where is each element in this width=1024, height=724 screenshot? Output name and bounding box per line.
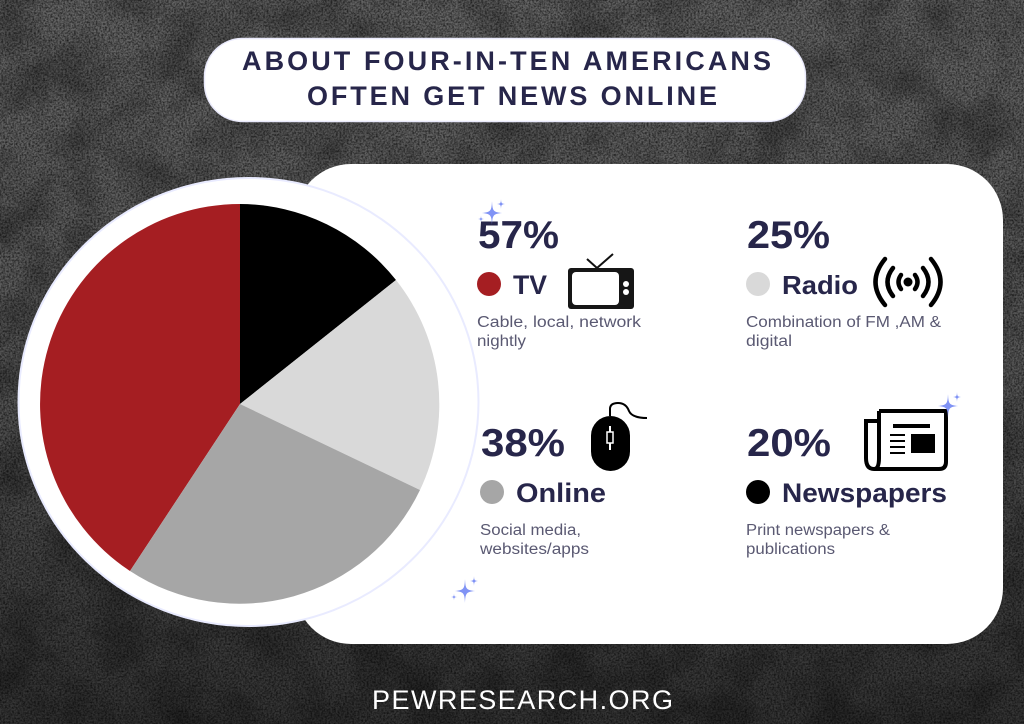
icon: computer mouse bbox=[591, 403, 647, 471]
title text: ABOUT FOUR-IN-TEN AMERICANS bbox=[242, 46, 771, 76]
slice: TV bbox=[40, 204, 240, 571]
footer source: PEWRESEARCH.ORG bbox=[372, 685, 673, 715]
pie chart with ring bbox=[18, 178, 478, 626]
block: Radio bbox=[746, 214, 942, 350]
block: TV bbox=[477, 199, 641, 350]
icon: newspaper bbox=[866, 411, 946, 469]
Online legend dot bbox=[480, 480, 504, 504]
title text: OFTEN GET NEWS ONLINE bbox=[307, 81, 717, 111]
TV percentage: 57% bbox=[478, 214, 559, 257]
TV label: TV bbox=[513, 270, 547, 300]
Radio legend dot bbox=[746, 272, 770, 296]
icon: sparkle bbox=[938, 392, 961, 418]
Radio description bbox=[746, 314, 942, 350]
Newspapers legend dot bbox=[746, 480, 770, 504]
icon: sparkle bbox=[478, 199, 505, 225]
Online description bbox=[479, 522, 589, 558]
TV description: Cable, local, network bbox=[477, 314, 641, 331]
title text bbox=[242, 46, 771, 111]
icon: television bbox=[568, 254, 634, 309]
Radio percentage: 25% bbox=[747, 214, 830, 257]
Newspapers description bbox=[746, 522, 891, 558]
Online description: Social media, bbox=[480, 522, 581, 539]
slice: Online bbox=[130, 404, 420, 604]
block: Newspapers bbox=[746, 392, 961, 558]
Newspapers description: publications bbox=[746, 541, 835, 558]
Online percentage: 38% bbox=[481, 422, 565, 465]
block: Online bbox=[451, 403, 647, 603]
title pill bbox=[204, 38, 806, 122]
Online description: websites/apps bbox=[479, 541, 589, 558]
TV description: nightly bbox=[477, 333, 526, 350]
TV legend dot bbox=[477, 272, 501, 296]
Newspapers description: Print newspapers & bbox=[746, 522, 891, 539]
Newspapers percentage: 20% bbox=[747, 422, 831, 465]
icon: broadcast signal bbox=[876, 259, 940, 305]
Radio description: Combination of FM ,AM & bbox=[746, 314, 942, 331]
TV description bbox=[477, 314, 641, 350]
slice: Newspapers bbox=[240, 204, 396, 404]
Radio label: Radio bbox=[782, 270, 858, 300]
Radio description: digital bbox=[746, 333, 792, 350]
slice: Radio bbox=[240, 280, 439, 490]
panel: white content card bbox=[295, 164, 1003, 644]
Newspapers label: Newspapers bbox=[782, 478, 947, 508]
icon: sparkle bbox=[451, 576, 478, 603]
Online label: Online bbox=[516, 478, 606, 508]
